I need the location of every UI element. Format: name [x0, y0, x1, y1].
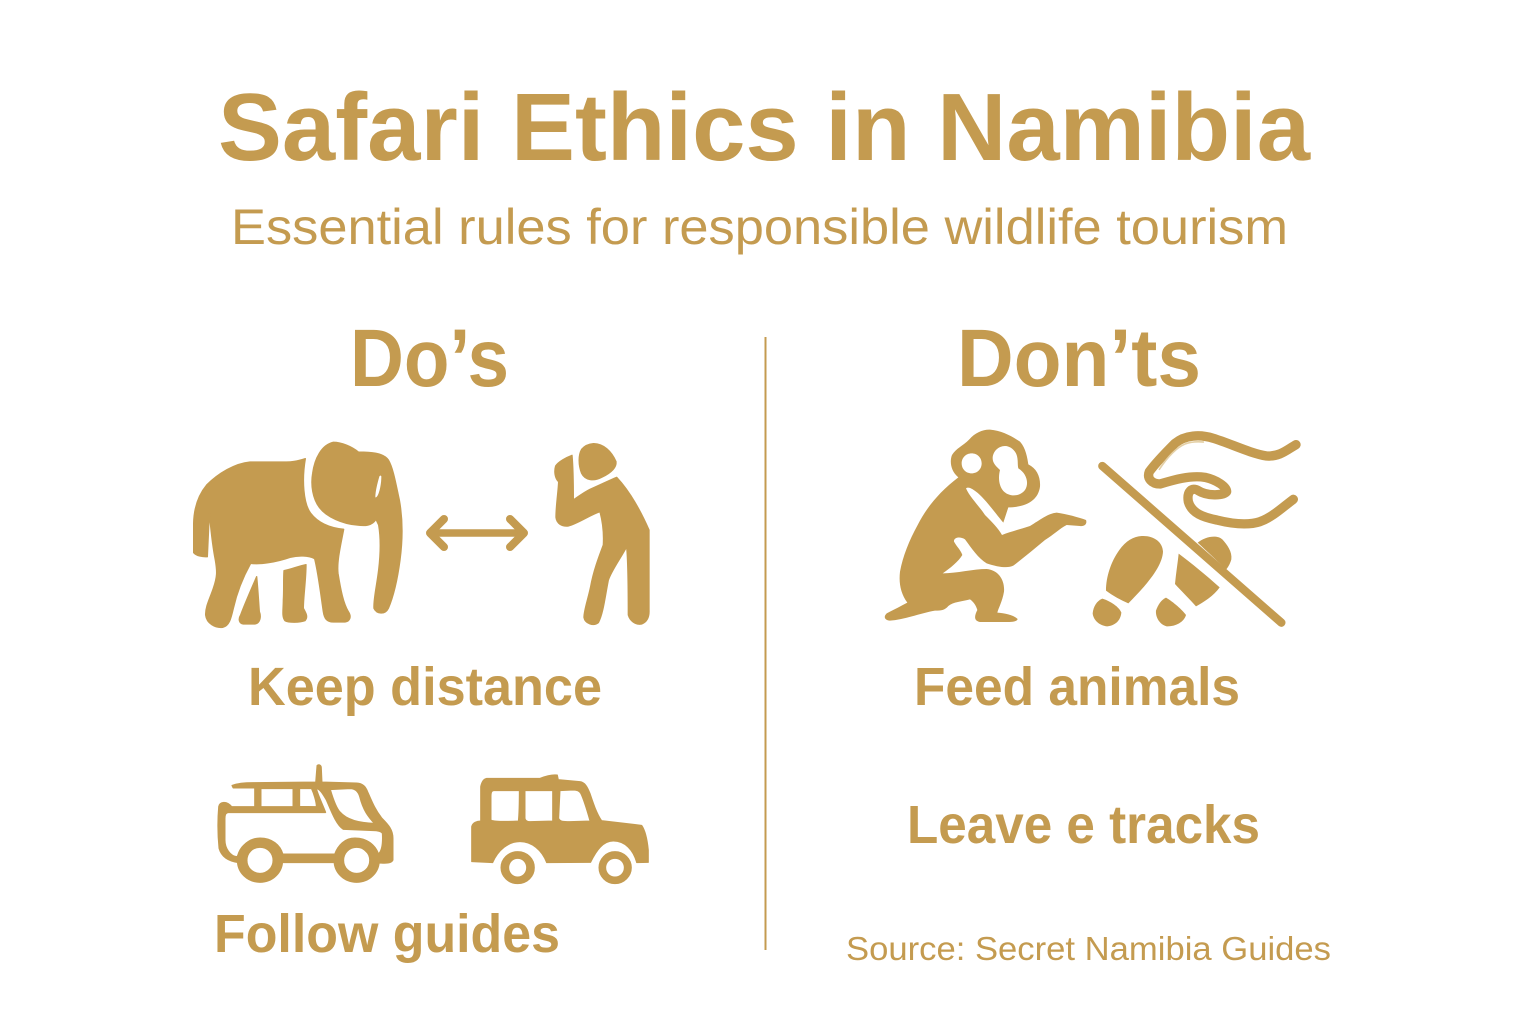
icon: outline safari van: [218, 765, 393, 882]
icon: hand outline: [1149, 436, 1296, 524]
label: Leave tracks: Leave e tracks: [907, 795, 1260, 855]
icon: right shoe print: [1175, 554, 1220, 606]
icon: monkey: [885, 430, 1086, 622]
icon: person: [555, 444, 649, 624]
icon: elephant: [194, 442, 402, 627]
icon: double arrow: [430, 519, 524, 547]
label: Feed animals: Feed animals: [914, 657, 1240, 717]
icon: solid safari jeep: [472, 775, 648, 884]
heading: Do's: Do’s: [350, 313, 509, 404]
center divider: [764, 337, 766, 950]
subtitle: Essential rules for responsible wildlife tourism: [231, 199, 1288, 255]
source credit: Source: Secret Namibia Guides: [846, 930, 1331, 967]
label: Follow guides: Follow guides: [214, 904, 560, 964]
icon: left shoe print: [1106, 536, 1163, 603]
icon: hand highlight: [1159, 442, 1203, 469]
icon: strike-through line: [1102, 466, 1281, 623]
heading: Don'ts: Don’ts: [957, 313, 1201, 404]
title: Safari Ethics in Namibia: [218, 74, 1311, 181]
icon: crossed-out feeding hand and footprints: [1093, 436, 1296, 626]
label: Keep distance: Keep distance: [248, 657, 602, 717]
